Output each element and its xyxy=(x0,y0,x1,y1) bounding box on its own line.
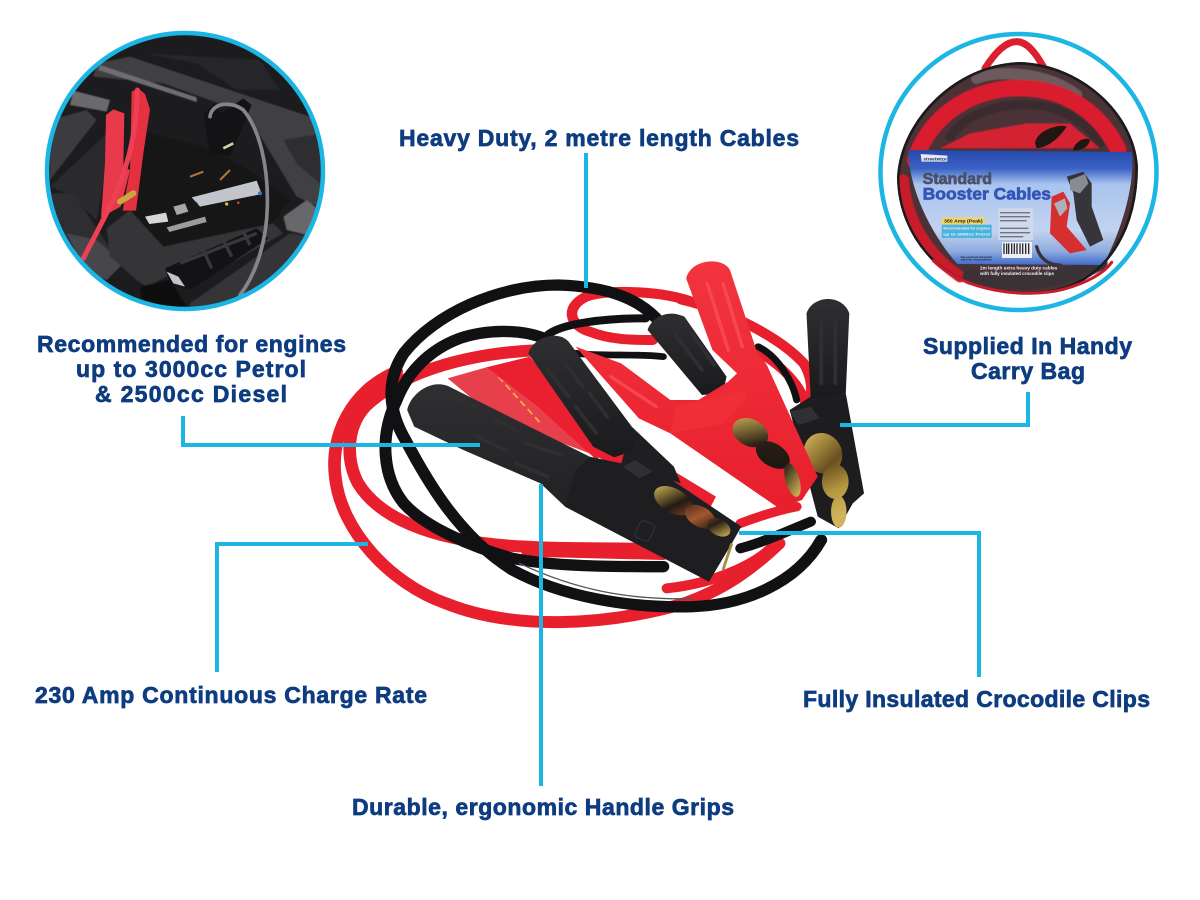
leader line: carry bag xyxy=(840,392,1028,425)
panel: carry bag photo circle: 350 Amp (Peak) xyxy=(944,219,983,225)
label: recommended engines: up to 3000cc Petrol xyxy=(76,356,306,382)
black cables xyxy=(385,285,821,607)
card headline: Standard xyxy=(923,171,992,188)
leader line: heavy duty cables xyxy=(584,153,588,288)
black clamp: right xyxy=(790,299,864,528)
red label tag xyxy=(448,367,590,453)
label: recommended engines xyxy=(37,331,346,407)
card footer: 2m length extra heavy duty cables xyxy=(980,265,1058,270)
label: handle grips: Durable, ergonomic Handle Grips xyxy=(352,794,734,820)
panel: carry bag photo circle: card for instructions xyxy=(961,258,993,262)
panel: carry bag photo circle: Booster Cables xyxy=(923,184,1051,203)
bag body xyxy=(898,63,1137,293)
jaw shapes xyxy=(1035,126,1067,148)
brand tag xyxy=(921,154,947,162)
amp tag xyxy=(942,217,985,224)
leader line: crocodile clips xyxy=(739,533,979,677)
leader line: handle grips xyxy=(539,484,543,786)
small clamps on card xyxy=(1067,172,1103,247)
black clamp: centre xyxy=(528,336,681,483)
icon: bag handle xyxy=(985,42,1043,68)
label: charge rate: 230 Amp Continuous Charge Rate xyxy=(35,682,427,708)
package card xyxy=(908,150,1132,265)
leader line: charge rate xyxy=(217,544,368,672)
icon: red clamps xyxy=(83,88,150,258)
connector xyxy=(165,228,268,290)
panel: carry bag photo circle: streetwize xyxy=(923,157,947,163)
panel: carry bag photo circle: See enclosed document xyxy=(961,255,992,259)
icon: battery labels xyxy=(145,181,262,233)
label: carry bag xyxy=(923,333,1132,384)
zip edge xyxy=(898,63,1137,293)
black clamp: front xyxy=(407,384,741,582)
panel: carry bag photo circle: up to 3000cc Petrol xyxy=(943,232,990,236)
panel: carry bag photo circle: Recommended for engines xyxy=(943,226,990,230)
label: recommended engines: Recommended for engines xyxy=(37,331,346,357)
label: carry bag: Supplied In Handy xyxy=(923,333,1132,359)
label: carry bag: Carry Bag xyxy=(971,358,1085,384)
label: crocodile clips: Fully Insulated Crocodile Clips xyxy=(803,686,1150,712)
label: cables: Heavy Duty, 2 metre length Cables xyxy=(399,125,799,151)
panel: engine bay photo circle xyxy=(44,30,326,312)
black clamp: rear, behind red xyxy=(648,314,726,395)
red cables xyxy=(334,292,811,622)
label: recommended engines: & 2500cc Diesel xyxy=(95,381,287,407)
leader line: engines xyxy=(183,416,480,445)
icon: black clamp and grey cable xyxy=(190,98,267,295)
panel: central photo of booster cables and clamps xyxy=(334,261,864,622)
panel: carry bag photo circle: with fully insulated crocodile clips xyxy=(979,271,1055,276)
panel: carry bag photo circle xyxy=(880,34,1156,310)
info panel and barcode xyxy=(998,208,1033,240)
red clamp xyxy=(576,261,818,508)
